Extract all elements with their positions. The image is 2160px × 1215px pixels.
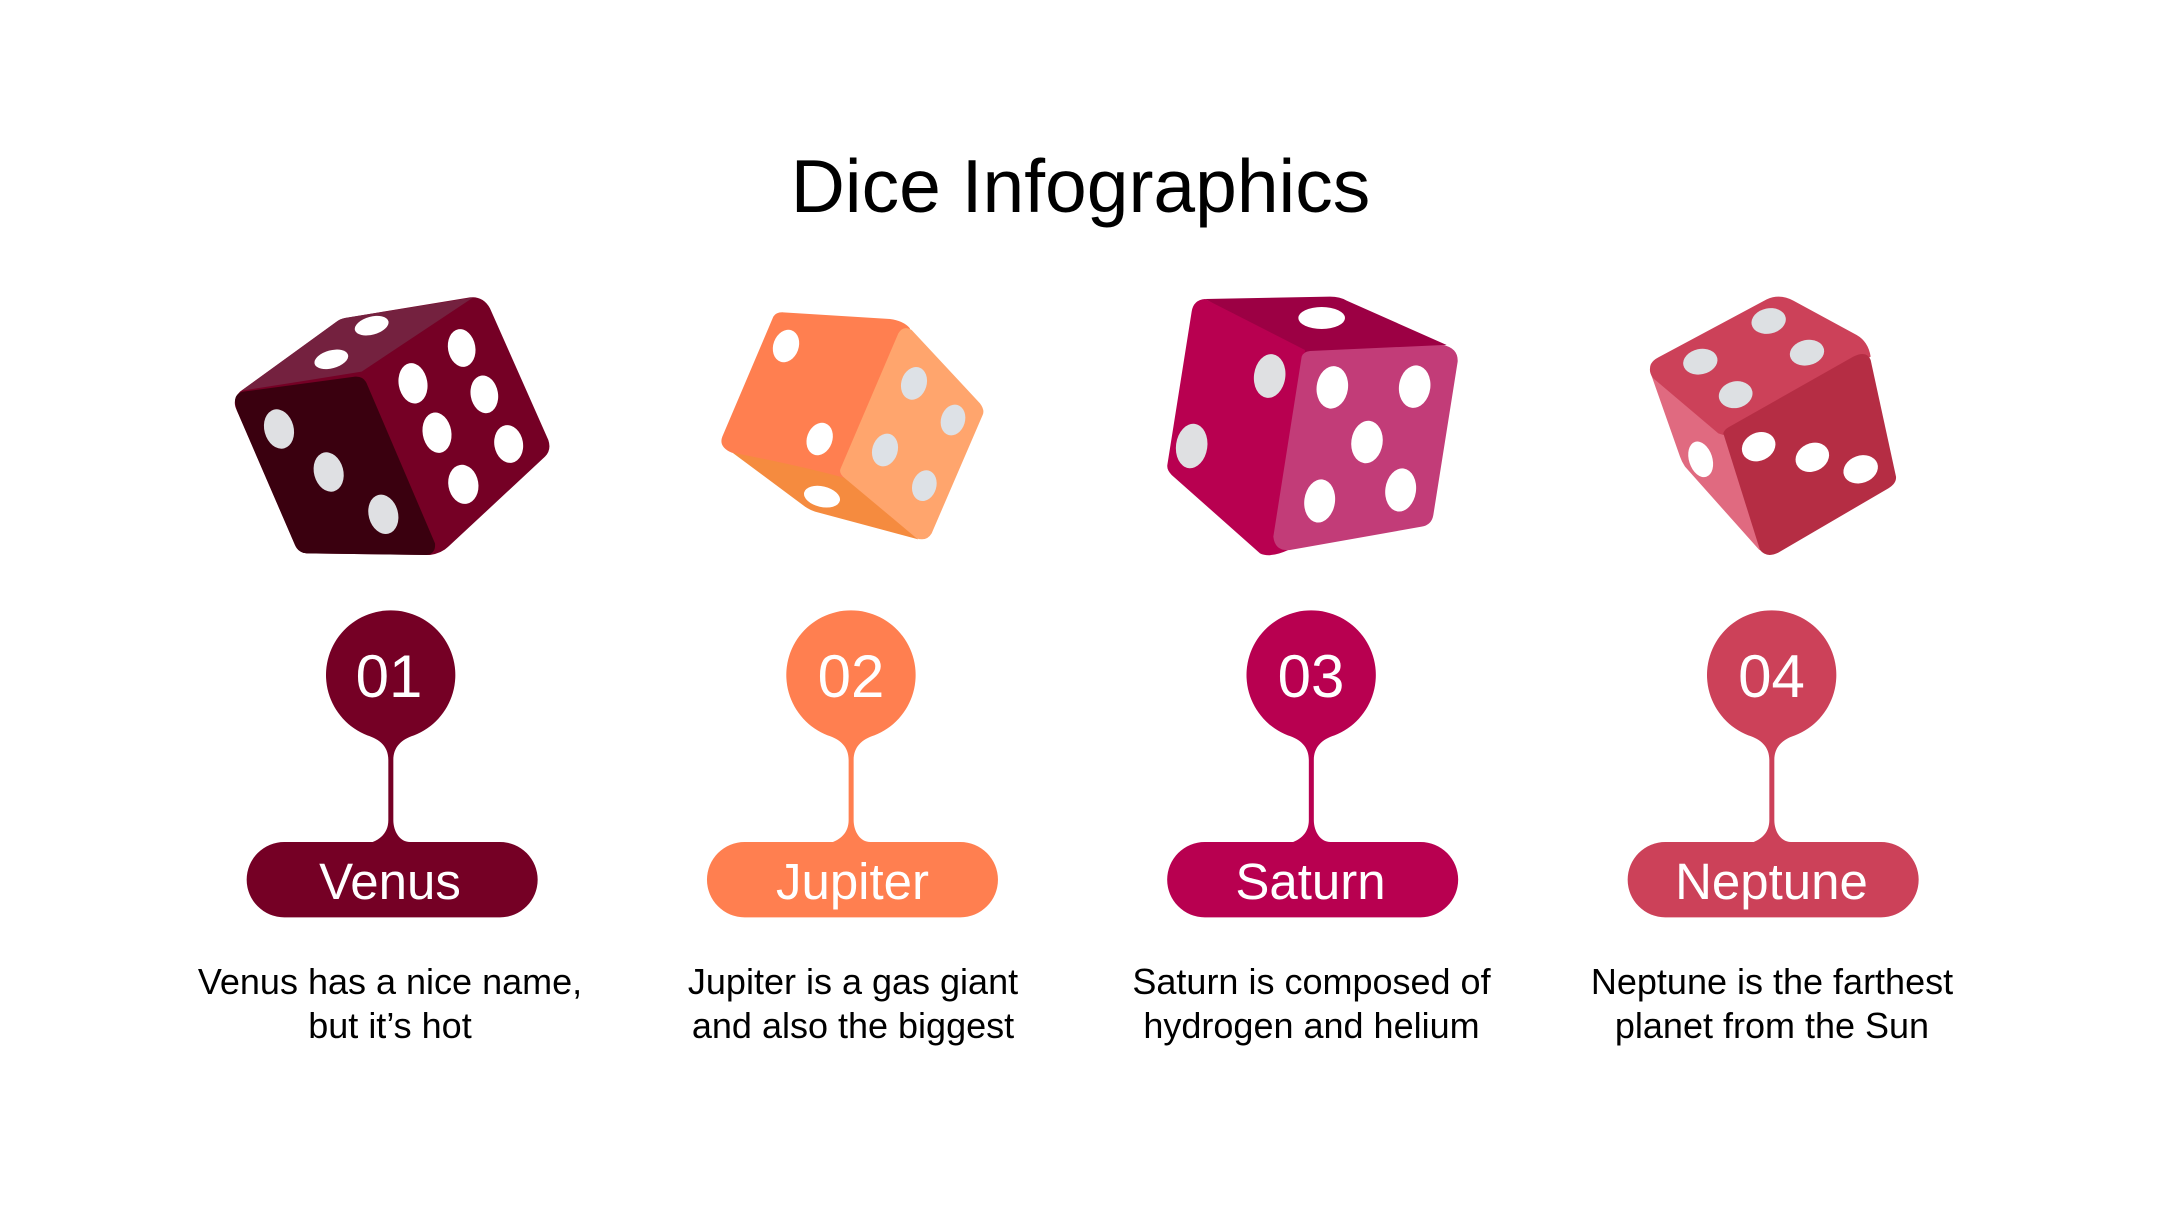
connector badge 4: Neptune — [1628, 610, 1919, 917]
description 3: hydrogen and helium — [1143, 1005, 1480, 1046]
connector badge 3: Saturn: Saturn — [1235, 853, 1386, 910]
connector badge 2: Jupiter: 02 — [818, 643, 884, 710]
description 1: Venus has a nice name, — [198, 961, 582, 1002]
die 3: magenta — [1167, 297, 1458, 555]
description 4: Neptune is the farthest — [1591, 961, 1953, 1002]
die 2: orange — [721, 312, 983, 539]
connector badge 1: Venus: 01 — [356, 643, 422, 710]
connector badge 2: Jupiter — [707, 610, 998, 917]
description 2: Jupiter is a gas giant — [688, 961, 1018, 1002]
connector badge 1: Venus — [247, 610, 538, 917]
description 3: Saturn is composed of — [1132, 961, 1492, 1002]
description 4: planet from the Sun — [1615, 1005, 1929, 1046]
connector badge 1: Venus: Venus — [319, 853, 461, 910]
die 4: rose red — [1650, 297, 1896, 555]
title: Dice Infographics — [791, 144, 1370, 228]
connector badge 3: Saturn: 03 — [1278, 643, 1344, 710]
connector badge 2: Jupiter: Jupiter — [776, 853, 929, 910]
description 1: but it’s hot — [308, 1005, 472, 1046]
die 1: dark maroon — [235, 297, 549, 555]
connector badge 4: Neptune: Neptune — [1675, 853, 1868, 910]
connector badge 3: Saturn — [1167, 610, 1458, 917]
description 2: and also the biggest — [692, 1005, 1014, 1046]
connector badge 4: Neptune: 04 — [1738, 643, 1805, 710]
